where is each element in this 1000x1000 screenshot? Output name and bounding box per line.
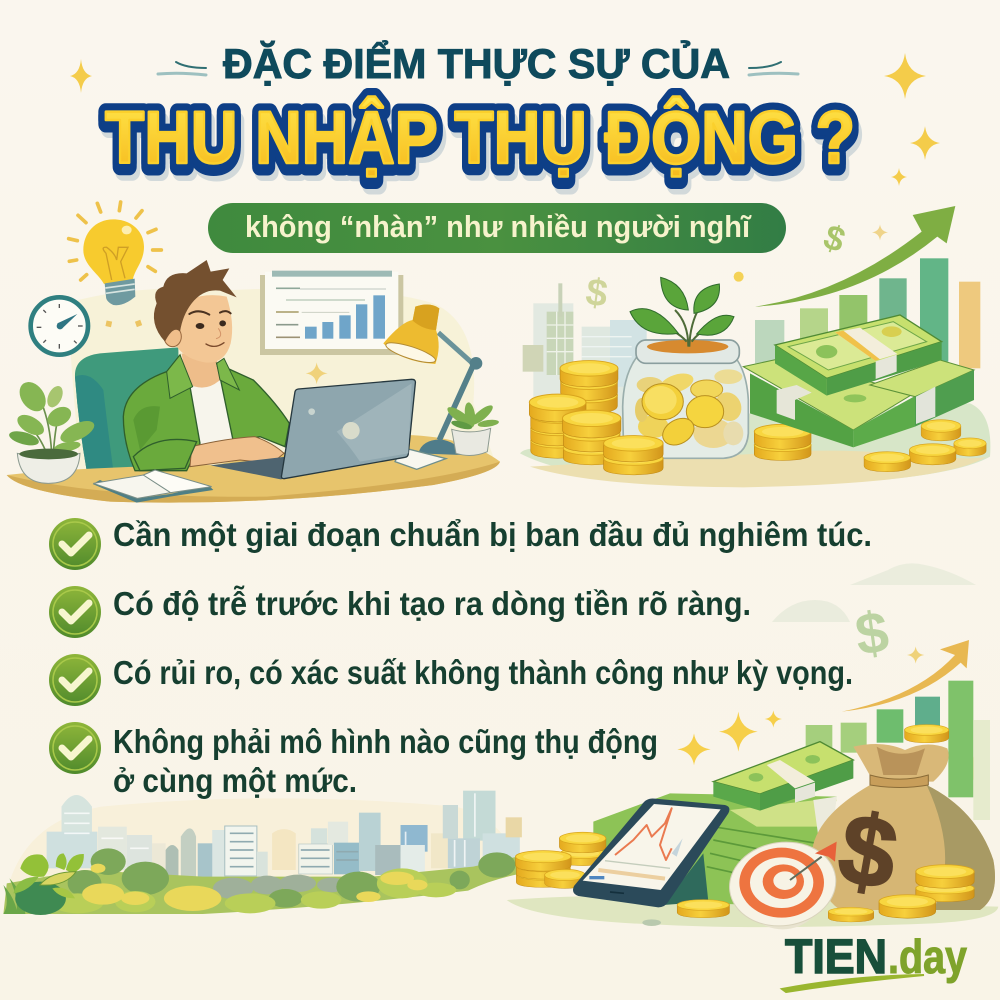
sparkles (677, 646, 985, 780)
item 2: Có độ trễ trước khi tạo ra dòng tiền rõ ràng. (113, 585, 751, 622)
foliage at left (3, 853, 84, 915)
arrow up (755, 206, 955, 307)
head (168, 295, 232, 363)
bar chart (755, 258, 980, 368)
right potted plant (445, 402, 499, 455)
ground shadow (507, 896, 998, 927)
notebook on desk (395, 447, 446, 469)
item 3: Có rủi ro, có xác suất không thành công như kỳ vọng. (113, 654, 853, 691)
icon: wall clock (31, 297, 88, 355)
heading line 2 with outline: THU NHẬP THỤ ĐỘNG ? (105, 96, 855, 179)
target (724, 835, 841, 933)
coin (677, 900, 729, 918)
scene: man working at laptop (7, 202, 500, 503)
buildings (47, 791, 522, 887)
item 4: Không phải mô hình nào cũng thụ động (113, 723, 658, 760)
ground (520, 403, 990, 487)
heading: title block (70, 39, 940, 188)
item 1 (49, 516, 872, 570)
front coins (604, 424, 811, 475)
cash stacks (743, 315, 974, 447)
sprout (630, 277, 734, 347)
coins behind bag (905, 725, 949, 743)
top bundle (775, 315, 942, 378)
logo: TIEN.day: .day (888, 930, 967, 983)
laptop (211, 379, 415, 479)
swooshes beside heading (158, 62, 798, 75)
heading line 2 with outline: THU NHẬP THỤ ĐỘNG ? (105, 96, 855, 179)
coins left (516, 832, 606, 888)
item 2 (49, 585, 751, 638)
item 3 (49, 654, 853, 706)
bar chart (806, 681, 990, 820)
logo: TIEN.day: TIEN (785, 931, 887, 984)
neck (182, 353, 221, 388)
cash pile (593, 742, 853, 907)
city backdrop (523, 283, 647, 443)
bushes (3, 848, 519, 914)
coin stacks left (529, 361, 621, 465)
arm (190, 437, 284, 467)
logo: TIEN.day (782, 930, 967, 992)
tablet (573, 798, 729, 907)
coins right (864, 420, 986, 472)
subtitle pill: không “nhàn” như nhiều người nghĩ (245, 209, 752, 244)
money bag: $ (831, 792, 905, 912)
coins right (828, 865, 974, 922)
money bag (812, 744, 995, 912)
desk lamp (383, 305, 482, 455)
scene: money jar and cash (520, 206, 990, 487)
icon: dollar signs (583, 217, 888, 316)
decorative sparkles around title (70, 53, 940, 186)
hair (154, 260, 237, 342)
heading line 2 with outline: THU NHẬP THỤ ĐỘNG ? (105, 100, 855, 183)
plant: left potted plant (8, 377, 97, 483)
clouds (772, 563, 976, 622)
presentation board with bar chart (260, 271, 403, 355)
item 1: Cần một giai đoạn chuẩn bị ban đầu đủ nghiêm túc. (113, 516, 872, 553)
shirt (123, 355, 200, 471)
man (123, 260, 289, 471)
checklist (49, 516, 872, 799)
icon: light bulb (69, 202, 161, 327)
backdrop glow (67, 288, 493, 473)
heading line 2 with outline: THU NHẬP THỤ ĐỘNG ? (108, 105, 858, 188)
big dollar sign: $ (851, 599, 893, 668)
warm haze (10, 798, 521, 913)
face details (189, 311, 231, 315)
heading line 1: ĐẶC ĐIỂM THỰC SỰ CỦA (223, 39, 730, 87)
sparkle (306, 362, 328, 384)
item 4: ở cùng một mức. (113, 762, 357, 799)
tee (186, 379, 235, 447)
jar with coins (623, 277, 748, 458)
scene: money bag, target and tablet (507, 599, 998, 933)
open book (93, 470, 213, 503)
desk (7, 435, 500, 503)
skyline illustration (3, 791, 522, 915)
icon: dollar signs: $ (583, 270, 610, 316)
icon: dollar signs: $ (819, 217, 850, 260)
subtitle pill (208, 203, 786, 253)
arrow up (842, 640, 969, 712)
item 4 (49, 722, 658, 799)
chair (75, 347, 180, 471)
